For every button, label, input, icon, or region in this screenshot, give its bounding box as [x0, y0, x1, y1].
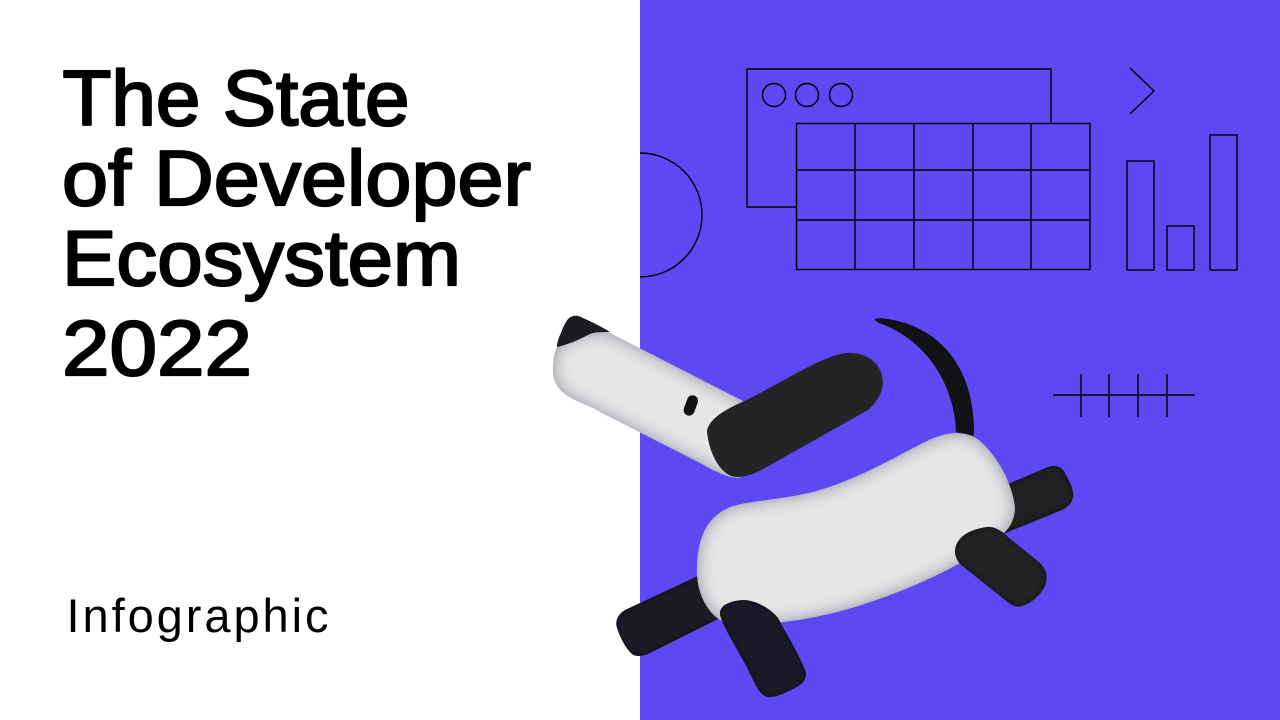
- icon: tick line: [1053, 374, 1195, 417]
- icon: half circle: [640, 153, 702, 277]
- icon: bar chart: [1127, 135, 1237, 270]
- subtitle: Infographic: [66, 589, 328, 642]
- icon: table grid: [796, 123, 1090, 270]
- dog ear: [707, 353, 883, 477]
- dog lower back leg: [955, 527, 1047, 607]
- dog nose: [557, 316, 610, 347]
- dog front leg: [616, 575, 720, 656]
- dog muzzle: [553, 332, 760, 478]
- icon: browser window: [747, 69, 1051, 207]
- dog tail: [875, 318, 974, 436]
- title: Ecosystem: [62, 214, 461, 302]
- title: 2022: [62, 304, 252, 392]
- dog body: [697, 433, 1015, 625]
- dog back leg: [1003, 466, 1073, 534]
- dog lower front leg: [720, 600, 806, 697]
- title: The State: [62, 54, 410, 142]
- dog head: [553, 316, 883, 478]
- title: of Developer: [62, 134, 531, 222]
- icon: chevron arrow: [1130, 68, 1154, 114]
- dog eye: [682, 394, 700, 417]
- panel: purple background: [640, 0, 1280, 720]
